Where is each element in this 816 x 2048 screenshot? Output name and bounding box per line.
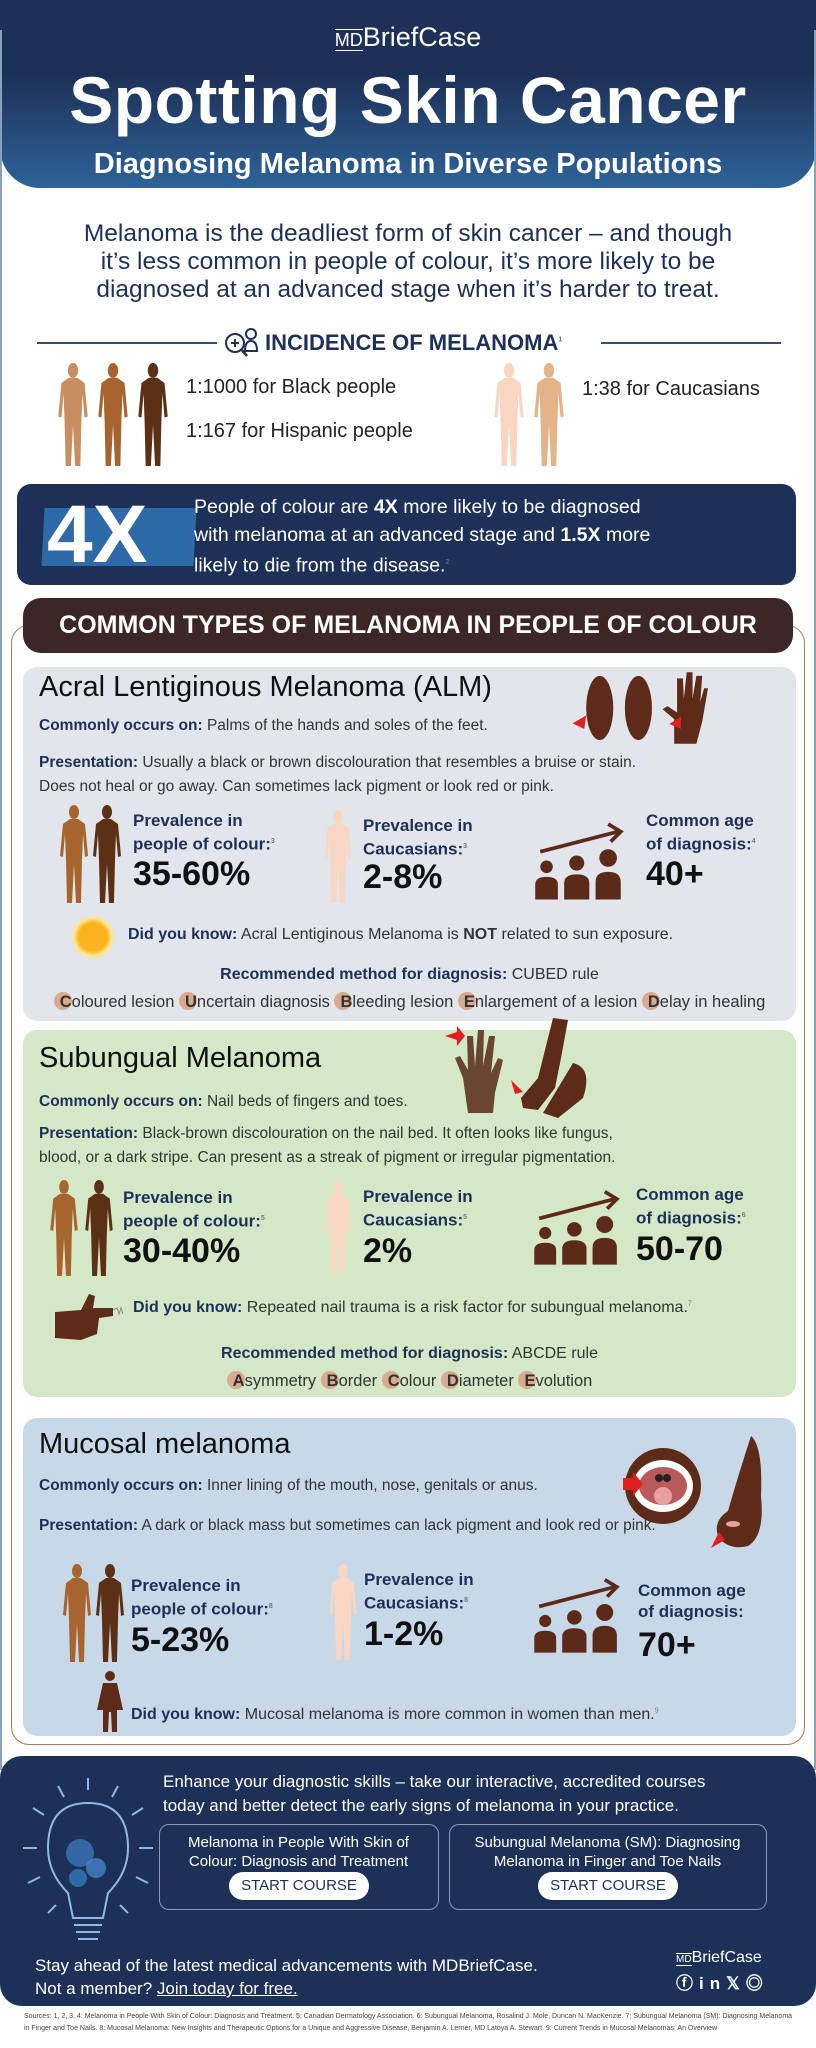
figures: caucasians <box>494 363 564 466</box>
intro text: Melanoma is the deadliest form of skin cancer – and though <box>84 220 732 247</box>
panel: ALM: Acral Lentiginous Melanoma (ALM) <box>39 671 492 703</box>
panel: Subungual: Commonly occurs on: Nail beds of fingers and toes. <box>39 1093 408 1110</box>
stat: age: 40+ <box>646 855 704 893</box>
stat: caucasians: Caucasians:5 <box>363 1211 467 1230</box>
incidence text: 1:1000 for Black people <box>186 376 396 398</box>
stat: age <box>535 811 756 900</box>
stat: caucasians <box>324 1181 473 1274</box>
course card 1: START COURSE <box>241 1877 357 1894</box>
stat: caucasians: 1-2% <box>364 1615 443 1653</box>
icon: hand and foot <box>445 1018 586 1118</box>
header banner <box>0 0 816 188</box>
stat: age: Common age <box>646 811 754 830</box>
stat: people of colour: 30-40% <box>123 1232 240 1270</box>
footer logo and social icons: ⓕin𝕏◎ <box>676 1974 769 1993</box>
stat: caucasians: Prevalence in <box>363 1187 473 1206</box>
intro text: it’s less common in people of colour, it’s more likely to be <box>101 248 715 275</box>
icon: pointing hand <box>55 1294 124 1340</box>
intro text <box>84 220 732 303</box>
icon: feet and hand <box>572 672 708 744</box>
intro text: diagnosed at an advanced stage when it’s harder to treat. <box>96 276 720 303</box>
icon: magnifier person <box>225 328 258 357</box>
logo: MDBriefCase <box>335 22 481 52</box>
footer logo and social icons: MDBriefCase <box>676 1949 762 1966</box>
stat: age <box>534 1578 746 1664</box>
subtitle: Diagnosing Melanoma in Diverse Populations <box>94 148 722 180</box>
footer CTA panel: Stay ahead of the latest medical advancements with MDBriefCase. <box>35 1956 538 1975</box>
footer CTA panel <box>0 1756 816 2006</box>
panel: Subungual: Presentation: Black-brown discolouration on the nail bed. It often looks like fungus, <box>39 1125 613 1142</box>
panel: Mucosal: Did you know: Mucosal melanoma is more common in women than men.9 <box>131 1706 659 1723</box>
course card 1: Melanoma in People With Skin of <box>188 1834 409 1851</box>
panel: Subungual: blood, or a dark stripe. Can present as a streak of pigment or irregular pigmentation. <box>39 1149 615 1166</box>
course card 1 <box>159 1824 439 1910</box>
stat: caucasians: 2-8% <box>363 858 442 896</box>
stat: people of colour <box>50 1180 265 1276</box>
panel: ALM: Commonly occurs on: Palms of the hands and soles of the feet. <box>39 717 488 734</box>
icon: sun <box>71 915 115 959</box>
stat: people of colour <box>60 805 275 903</box>
stat: caucasians: 2% <box>363 1232 412 1270</box>
stat: age <box>534 1185 746 1268</box>
stat: people of colour: Prevalence in <box>131 1576 241 1595</box>
course card 2: Melanoma in Finger and Toe Nails <box>494 1853 721 1870</box>
panel: Subungual: Recommended method for diagnosis: ABCDE rule <box>221 1345 598 1362</box>
sources: Sources: 1, 2, 3, 4: Melanoma in People With Skin of Colour: Diagnosis and Treatment. 5: Canadian Dermatology Association. 6: Subungual Melanoma, Rosalind J. Mole, Duncan N. MacKenzie. 7: Subungual Melanoma (SM): Diagnosing Melanoma in Finger and Toe Nails. 8: Mucosal Melanoma: New Insights and Therapeutic Options for a Unique and Aggressive Disease, Benjamin A. Lerner, MD Latoya A. Stewart. 9: Current Trends in Mucosal Melanomas: An Overview <box>24 2013 792 2032</box>
panel: Mucosal: Commonly occurs on: Inner lining of the mouth, nose, genitals or anus. <box>39 1477 538 1494</box>
footer CTA panel: Not a member? Join today for free. <box>35 1979 298 1998</box>
stat: people of colour: 35-60% <box>133 855 250 893</box>
footer CTA panel: Enhance your diagnostic skills – take our interactive, accredited courses <box>163 1772 705 1791</box>
stat: caucasians <box>329 1564 474 1660</box>
panel: Subungual: Did you know: Repeated nail trauma is a risk factor for subungual melanoma.7 <box>133 1299 692 1316</box>
stat: caucasians: Prevalence in <box>363 816 473 835</box>
footer CTA panel: today and better detect the early signs of melanoma in your practice. <box>163 1796 679 1815</box>
stat: caucasians: Caucasians:8 <box>364 1594 468 1613</box>
panel: ALM: Does not heal or go away. Can sometimes lack pigment or look red or pink. <box>39 778 554 795</box>
course card 2 <box>449 1824 767 1910</box>
stat: age: Common age <box>636 1185 744 1204</box>
stat: caucasians: Caucasians:3 <box>363 840 467 859</box>
text: 1:38 for Caucasians <box>582 378 760 400</box>
icon: woman <box>97 1671 123 1732</box>
stat: people of colour: Prevalence in <box>133 811 243 830</box>
panel: ALM: Did you know: Acral Lentiginous Melanoma is NOT related to sun exposure. <box>128 926 673 943</box>
stat: people of colour: people of colour:3 <box>133 835 275 854</box>
stat: people of colour: people of colour:8 <box>131 1600 273 1619</box>
stat: caucasians: Prevalence in <box>364 1570 474 1589</box>
panel: ALM: Coloured lesion Uncertain diagnosis Bleeding lesion Enlargement of a lesion Delay in healing <box>60 993 765 1011</box>
stat: age: 70+ <box>638 1626 696 1664</box>
section heading: COMMON TYPES OF MELANOMA IN PEOPLE OF COLOUR <box>59 611 757 639</box>
panel: Subungual: Subungual Melanoma <box>39 1042 321 1074</box>
outer brown border <box>11 625 805 1745</box>
stat: caucasians <box>324 810 473 903</box>
stat: people of colour <box>63 1564 273 1662</box>
section heading <box>23 598 793 653</box>
stat: age: of diagnosis: <box>638 1602 744 1621</box>
4X callout: likely to die from the disease.2 <box>194 554 449 576</box>
4X callout: with melanoma at an advanced stage and 1.5X more <box>194 524 650 546</box>
4X callout <box>17 484 796 585</box>
stat: age: of diagnosis:4 <box>646 835 756 854</box>
panel: Mucosal: Presentation: A dark or black mass but sometimes can lack pigment and look red or pink. <box>39 1517 656 1534</box>
panel: Mucosal <box>23 1418 796 1736</box>
text: 1:167 for Hispanic people <box>186 420 413 442</box>
course card 1: Colour: Diagnosis and Treatment <box>189 1853 408 1870</box>
incidence heading <box>37 328 781 357</box>
panel: ALM: Recommended method for diagnosis: CUBED rule <box>220 966 599 983</box>
icon: mouth and nose <box>623 1436 762 1548</box>
panel: ALM <box>23 667 796 1021</box>
stat: people of colour: 5-23% <box>131 1621 229 1659</box>
icon: lightbulb <box>23 1778 153 1940</box>
panel: Subungual: Asymmetry Border Colour Diameter Evolution <box>233 1372 592 1390</box>
stat: age: 50-70 <box>636 1230 723 1268</box>
stat: age: of diagnosis:6 <box>636 1209 746 1228</box>
footer logo and social icons <box>676 1949 769 1993</box>
stat: age: Common age <box>638 1581 746 1600</box>
stat: people of colour: people of colour:5 <box>123 1212 265 1231</box>
course card 2: START COURSE <box>550 1877 666 1894</box>
stat: people of colour: Prevalence in <box>123 1188 233 1207</box>
panel: ALM: Presentation: Usually a black or brown discolouration that resembles a bruise or stain. <box>39 754 636 771</box>
figures: people of colour <box>58 363 168 466</box>
4X callout: People of colour are 4X more likely to be diagnosed <box>194 496 641 518</box>
panel: Mucosal: Mucosal melanoma <box>39 1428 290 1460</box>
panel: Subungual <box>23 1030 796 1397</box>
title: Spotting Skin Cancer <box>69 63 747 137</box>
4X callout: 4X <box>47 489 147 580</box>
incidence heading: INCIDENCE OF MELANOMA1 <box>265 330 562 355</box>
course card 2: Subungual Melanoma (SM): Diagnosing <box>474 1834 740 1851</box>
